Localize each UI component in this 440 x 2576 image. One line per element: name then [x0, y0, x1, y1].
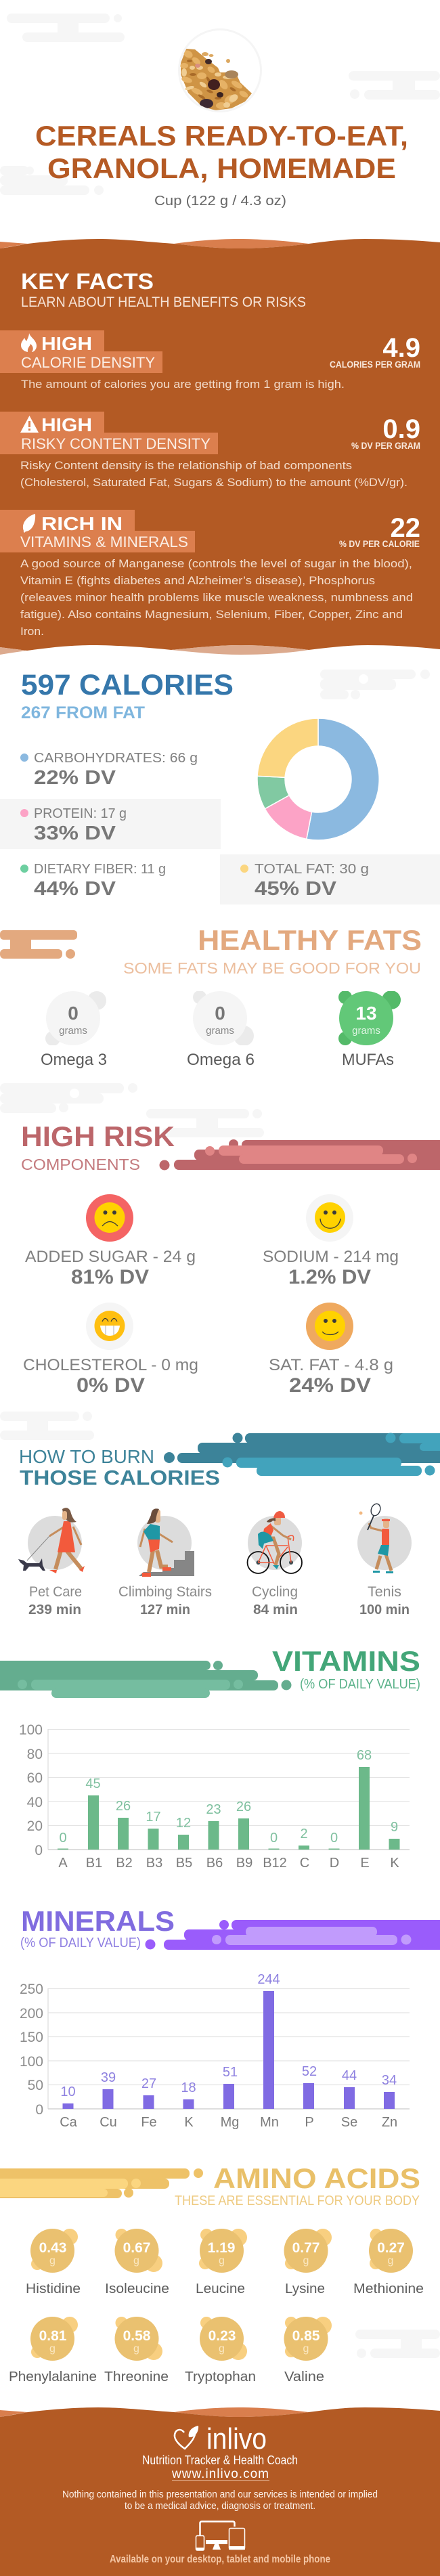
decoration: green bars	[0, 1661, 291, 1698]
mufas: MUFAs	[342, 1051, 394, 1069]
bar chart: minerals: Zn	[382, 2115, 397, 2130]
amino: threonine: g	[133, 2343, 139, 2355]
fact: high calorie density	[0, 330, 420, 391]
activity: tennis: 100 min	[359, 1602, 410, 1617]
activity: pet care	[18, 1508, 85, 1617]
icon: woman walking dog	[18, 1508, 85, 1573]
bar chart: vitamins: 2	[300, 1827, 308, 1841]
bar chart: vitamins: B3	[146, 1856, 162, 1871]
description paragraph	[20, 557, 413, 638]
bar chart: vitamins: A	[58, 1856, 68, 1871]
bar chart: minerals: Mg	[221, 2115, 239, 2130]
icon: devices	[196, 2521, 245, 2550]
bar chart: vitamins: 45	[85, 1776, 101, 1791]
fact: high calorie density: CALORIES PER GRAM	[330, 359, 420, 370]
cholesterol	[23, 1303, 198, 1397]
fact: high risky content density: % DV PER GRAM	[351, 441, 420, 451]
disclaimer	[62, 2489, 378, 2512]
sodium: SODIUM - 214 mg	[263, 1248, 399, 1266]
decoration: purple bars	[145, 1920, 440, 1950]
amino: tryptophan: g	[219, 2343, 225, 2355]
subheading: SOME FATS MAY BE GOOD FOR YOU	[123, 959, 421, 977]
donut chart	[257, 718, 379, 840]
cholesterol: CHOLESTEROL - 0 mg	[23, 1356, 198, 1374]
activity: cycling	[248, 1511, 302, 1617]
bar chart: vitamins: 40	[27, 1795, 43, 1810]
amino: methionine: 0.27	[377, 2240, 405, 2256]
title	[35, 120, 408, 184]
activity: cycling: 84 min	[253, 1602, 298, 1617]
legend: dietary fiber: 44% DV	[34, 878, 116, 900]
amino: lysine	[284, 2229, 332, 2296]
legend: dietary fiber	[20, 862, 166, 900]
fact: high risky content density: HIGH	[41, 414, 92, 435]
fact: high risky content density: RISKY CONTENT DENSITY	[21, 435, 211, 452]
bar chart: minerals: 39	[101, 2070, 116, 2085]
heading: 597 calories: 597 CALORIES	[21, 669, 234, 701]
description paragraph: Vitamin E (fights diabetes and Alzheimer’s disease), Phosphorus	[20, 574, 375, 587]
bar chart: vitamins: 0	[35, 1843, 43, 1858]
amino: valine: g	[303, 2343, 309, 2355]
panel: key facts	[0, 239, 440, 655]
amino: leucine: Leucine	[196, 2282, 245, 2296]
bar chart: vitamins: D	[330, 1856, 339, 1871]
bar chart: minerals	[20, 1972, 410, 2130]
legend: total fat: TOTAL FAT: 30 g	[255, 862, 369, 877]
bar chart: minerals: 44	[342, 2068, 357, 2083]
bar chart: vitamins: B12	[263, 1856, 287, 1871]
amino: isoleucine: 0.67	[123, 2240, 150, 2256]
fact: high calorie density: CALORIE DENSITY	[21, 354, 155, 371]
amino: threonine	[104, 2317, 169, 2384]
amino: phenylalanine: 0.81	[39, 2328, 67, 2344]
bar chart: minerals: 18	[181, 2080, 196, 2095]
omega 3: 0	[68, 1003, 79, 1024]
amino: threonine: Threonine	[104, 2370, 169, 2384]
amino: histidine: Histidine	[26, 2282, 81, 2296]
decoration: yellow bars	[0, 2168, 203, 2198]
amino: lysine: 0.77	[292, 2240, 320, 2256]
bar chart: minerals: Mn	[260, 2115, 279, 2130]
serving size: Cup (122 g / 4.3 oz)	[154, 194, 286, 209]
bar chart: vitamins: 60	[27, 1770, 43, 1786]
icon: woman climbing stairs	[139, 1508, 194, 1577]
bar chart: minerals: Cu	[100, 2115, 117, 2130]
sodium: 1.2% DV	[288, 1266, 371, 1288]
legend: carbohydrates: 22% DV	[34, 767, 116, 789]
amino: threonine: 0.58	[123, 2328, 151, 2344]
fact: high risky content density: (Cholesterol, Saturated Fat, Sugars & Sodium) to the amount (%DV/gr).	[20, 476, 408, 489]
amino: phenylalanine: g	[49, 2343, 56, 2355]
bar chart: minerals: K	[184, 2115, 194, 2130]
amino: lysine: g	[303, 2255, 309, 2267]
amino: valine: Valine	[284, 2370, 324, 2384]
legend: carbohydrates	[20, 751, 198, 789]
subheading: percent of daily value: (% OF DAILY VALUE)	[20, 1936, 141, 1950]
bar chart: vitamins: B2	[116, 1856, 133, 1871]
amino: phenylalanine	[9, 2317, 97, 2384]
amino: tryptophan	[185, 2317, 256, 2384]
icon: flame	[21, 333, 37, 352]
heading: those calories: THOSE CALORIES	[20, 1466, 220, 1489]
fact: high calorie density: The amount of calories you are getting from 1 gram is high.	[21, 378, 345, 391]
amino: leucine	[196, 2229, 247, 2296]
activity: climbing stairs: Climbing Stairs	[118, 1584, 212, 1600]
fact: rich in vitamins and minerals: RICH IN	[41, 513, 123, 534]
heading: high risk: HIGH RISK	[21, 1120, 175, 1152]
panel background with wave edges	[0, 239, 440, 655]
description paragraph: Iron.	[20, 625, 44, 638]
legend: total fat: 45% DV	[255, 878, 337, 900]
amino: histidine: g	[49, 2255, 56, 2267]
subheading: percent of daily value: (% OF DAILY VALUE)	[300, 1677, 420, 1692]
panel: footer	[0, 2407, 440, 2576]
added sugar	[25, 1194, 196, 1288]
bar chart: vitamins: 100	[19, 1722, 43, 1738]
bar chart: vitamins: B1	[86, 1856, 102, 1871]
amino: lysine: Lysine	[285, 2282, 325, 2296]
bar chart: minerals: 51	[223, 2065, 238, 2080]
omega 3: grams	[59, 1025, 87, 1036]
panel: calories	[0, 669, 440, 904]
amino: tryptophan: 0.23	[208, 2328, 236, 2344]
bar chart: vitamins: 9	[391, 1820, 398, 1835]
amino: valine	[284, 2317, 332, 2384]
activity: climbing stairs	[118, 1508, 212, 1617]
bar chart: minerals: Se	[341, 2115, 357, 2130]
heading: amino acids: AMINO ACIDS	[213, 2162, 420, 2194]
bar chart: minerals: P	[305, 2115, 314, 2130]
availability note: Available on your desktop, tablet and mobile phone	[110, 2554, 330, 2565]
fact: rich in vitamins and minerals	[0, 510, 420, 638]
bar chart: minerals: 34	[382, 2073, 397, 2088]
bar chart: minerals: 100	[20, 2054, 43, 2070]
total fat background	[220, 854, 440, 904]
amino: leucine: g	[219, 2255, 225, 2267]
title: GRANOLA, HOMEMADE	[47, 152, 396, 184]
subheading: THESE ARE ESSENTIAL FOR YOUR BODY	[175, 2193, 420, 2208]
subheading: LEARN ABOUT HEALTH BENEFITS OR RISKS	[21, 294, 306, 310]
footer background with wave	[0, 2407, 440, 2576]
mufas	[338, 990, 401, 1069]
heading: key facts: KEY FACTS	[21, 269, 154, 294]
amino: isoleucine: Isoleucine	[105, 2282, 169, 2296]
omega 6: grams	[206, 1025, 234, 1036]
fact: high risky content density	[0, 412, 420, 489]
amino: histidine	[26, 2229, 81, 2296]
bar chart: vitamins: 0	[59, 1831, 67, 1846]
sodium	[263, 1194, 399, 1288]
title: CEREALS READY-TO-EAT,	[35, 120, 408, 152]
legend: dietary fiber: DIETARY FIBER: 11 g	[34, 862, 166, 877]
bar chart: minerals: 250	[20, 1982, 43, 1997]
decoration: red bars	[160, 1139, 440, 1170]
subheading: from fat: 267 FROM FAT	[21, 703, 145, 722]
panel: minerals	[20, 1905, 440, 2130]
omega 3: Omega 3	[41, 1051, 107, 1069]
icon: warning triangle	[20, 416, 39, 433]
heading: vitamins: VITAMINS	[272, 1645, 420, 1677]
bar chart: vitamins: 20	[27, 1818, 43, 1834]
fact: high risky content density: 0.9	[382, 414, 420, 444]
bar chart: vitamins: B9	[236, 1856, 252, 1871]
activity: climbing stairs: 127 min	[140, 1602, 190, 1617]
logo: inlivo heart and leaf: inlivo	[206, 2422, 267, 2455]
bar chart: minerals: 50	[28, 2078, 43, 2093]
saturated fat: SAT. FAT - 4.8 g	[269, 1356, 393, 1374]
bar chart: vitamins: 26	[116, 1799, 131, 1814]
description paragraph: fatigue). Also contains Magnesium, Selenium, Fiber, Copper, Zinc and	[20, 608, 403, 621]
bar chart: vitamins: 23	[206, 1802, 221, 1817]
amino: leucine: 1.19	[208, 2240, 235, 2256]
decoration: teal bars	[164, 1433, 440, 1476]
activity: cycling: Cycling	[252, 1584, 298, 1600]
icon: smiling face	[315, 1202, 345, 1233]
amino: histidine: 0.43	[39, 2240, 66, 2256]
legend: protein: 33% DV	[34, 823, 116, 844]
heading: healthy fats: HEALTHY FATS	[198, 924, 422, 956]
fact: rich in vitamins and minerals: % DV PER CALORIE	[339, 539, 420, 549]
bar chart: minerals: Fe	[141, 2115, 157, 2130]
description paragraph: A good source of Manganese (controls the level of sugar in the blood),	[20, 557, 412, 570]
bar chart: vitamins: 17	[146, 1810, 161, 1825]
amino: isoleucine	[105, 2229, 169, 2296]
fact: high risky content density: Risky Content density is the relationship of bad components	[20, 459, 352, 472]
activity: tennis: Tenis	[368, 1584, 401, 1600]
mufas: 13	[355, 1003, 377, 1024]
heading: minerals: MINERALS	[21, 1905, 175, 1937]
panel: high risk components	[21, 1120, 440, 1397]
fact: rich in vitamins and minerals: 22	[390, 513, 420, 543]
amino: methionine	[353, 2229, 424, 2296]
bar chart: minerals: 27	[141, 2076, 156, 2091]
icon: happy face	[315, 1311, 345, 1341]
bar chart: minerals: 150	[20, 2030, 43, 2045]
icon: tennis player	[359, 1502, 393, 1573]
icon: sad face	[95, 1202, 125, 1233]
activity: pet care: Pet Care	[29, 1584, 82, 1600]
bar chart: minerals: 10	[60, 2084, 76, 2099]
omega 6	[187, 990, 255, 1069]
decoration: peach bars	[0, 930, 77, 959]
amino: isoleucine: g	[133, 2255, 139, 2267]
food photo: granola in a circle	[179, 30, 261, 111]
bar chart: minerals: 244	[257, 1972, 280, 1987]
bar chart: vitamins	[19, 1722, 410, 1871]
panel: vitamins	[0, 1645, 420, 1871]
bar chart: vitamins: 68	[357, 1748, 372, 1763]
legend: total fat	[240, 862, 369, 900]
bar chart: vitamins: 80	[27, 1747, 43, 1762]
fact: high calorie density: 4.9	[382, 333, 420, 363]
bar chart: vitamins: B6	[206, 1856, 223, 1871]
amino: valine: 0.85	[292, 2328, 320, 2344]
amino: methionine: g	[388, 2255, 393, 2267]
disclaimer: to be a medical advice, diagnosis or treatment.	[125, 2500, 315, 2512]
omega 6: Omega 6	[187, 1051, 255, 1069]
bar chart: vitamins: 12	[176, 1816, 191, 1831]
icon: leaf	[23, 514, 35, 533]
heading: how to burn: HOW TO BURN	[19, 1446, 154, 1467]
subheading: components: COMPONENTS	[21, 1156, 140, 1173]
bar chart: vitamins: 26	[236, 1799, 251, 1814]
legend: carbohydrates: CARBOHYDRATES: 66 g	[34, 751, 198, 766]
fact: rich in vitamins and minerals: VITAMINS & MINERALS	[20, 533, 188, 550]
panel: healthy fats	[0, 924, 422, 1069]
amino: phenylalanine: Phenylalanine	[9, 2370, 97, 2384]
disclaimer: Nothing contained in this presentation and our services is intended or implied	[62, 2489, 378, 2500]
omega 3	[41, 991, 107, 1069]
icon: woman on bicycle	[248, 1511, 302, 1573]
bar chart: vitamins: K	[390, 1856, 399, 1871]
activity: pet care: 239 min	[28, 1602, 81, 1617]
website link: www.inlivo.com	[171, 2467, 269, 2481]
description paragraph: (releaves minor health problems like muscle weakness, numbness and	[20, 591, 413, 604]
bar chart: vitamins: C	[300, 1856, 309, 1871]
bar chart: vitamins: E	[360, 1856, 370, 1871]
icon: grinning face	[95, 1311, 125, 1341]
bar chart: minerals: 52	[302, 2064, 317, 2079]
amino: tryptophan: Tryptophan	[185, 2370, 256, 2384]
logo: inlivo heart and leaf	[175, 2422, 267, 2455]
bar chart: vitamins: 0	[330, 1831, 338, 1846]
bar chart: vitamins: 0	[270, 1831, 278, 1846]
bar chart: minerals: 0	[35, 2102, 43, 2118]
omega 6: 0	[215, 1003, 225, 1024]
panel: how to burn those calories	[18, 1433, 440, 1617]
added sugar: 81% DV	[71, 1266, 149, 1288]
bar chart: minerals: Ca	[60, 2115, 78, 2130]
fact: high calorie density: HIGH	[41, 333, 92, 354]
added sugar: ADDED SUGAR - 24 g	[25, 1248, 196, 1266]
legend: protein: PROTEIN: 17 g	[34, 806, 127, 821]
tagline: Nutrition Tracker & Health Coach	[142, 2453, 298, 2467]
bar chart: minerals: 200	[20, 2006, 43, 2022]
mufas: grams	[352, 1025, 380, 1036]
panel: amino acids	[0, 2162, 424, 2384]
activity: tennis	[357, 1502, 412, 1617]
cholesterol: 0% DV	[76, 1374, 145, 1397]
amino: methionine: Methionine	[353, 2282, 424, 2296]
saturated fat: 24% DV	[289, 1374, 371, 1397]
protein background	[0, 799, 221, 849]
saturated fat	[269, 1303, 393, 1397]
legend: protein	[20, 806, 127, 844]
bar chart: vitamins: B5	[176, 1856, 192, 1871]
